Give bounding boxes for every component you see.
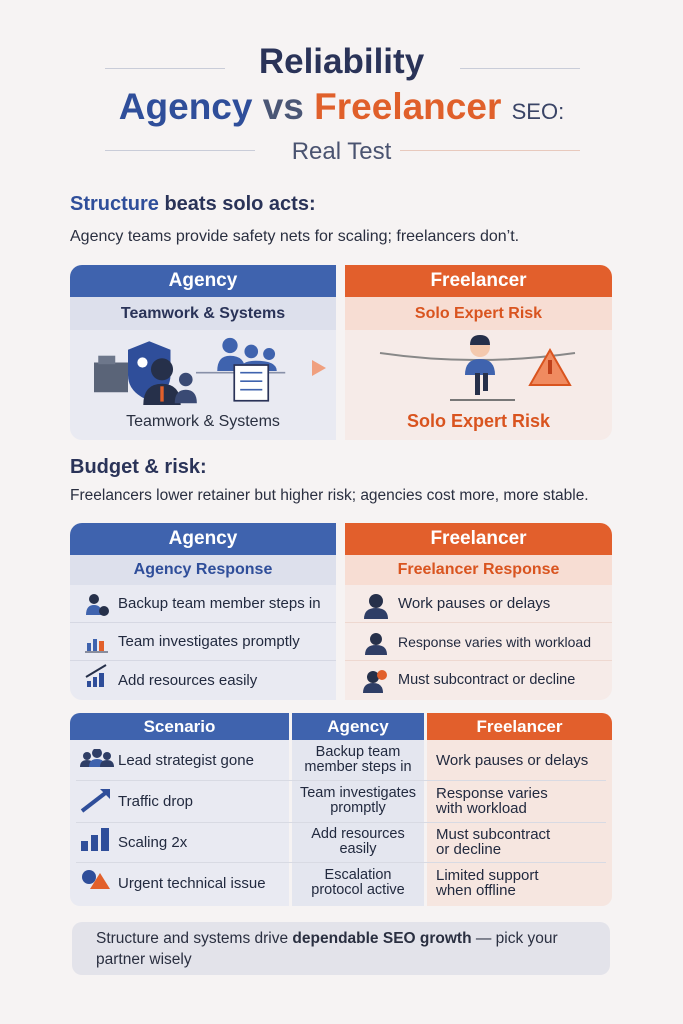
panel: freelancer response: Work pauses or delays <box>398 595 550 612</box>
panel: agency response: Agency <box>169 528 237 549</box>
table: scenarios: Agency <box>327 717 389 736</box>
panel: agency response: Backup team member steps in <box>118 595 321 612</box>
panel: agency teamwork <box>70 265 336 440</box>
callout: footer: Structure and systems drive dependable SEO growth — pick your partner wisely <box>96 930 558 968</box>
panel: agency teamwork: Teamwork & Systems <box>121 305 285 322</box>
panel: agency teamwork: Teamwork & Systems <box>126 413 280 430</box>
panel: freelancer response: Freelancer Response <box>398 561 559 578</box>
table: scenarios: Work pauses or delays <box>436 752 588 768</box>
panel: freelancer solo <box>345 265 612 440</box>
table: scenarios: Limited support <box>436 867 539 884</box>
panel: freelancer solo: Solo Expert Risk <box>415 305 542 322</box>
icon: team illustration <box>94 338 286 405</box>
table: scenarios: Scaling 2x <box>118 834 187 850</box>
panel: freelancer solo: Solo Expert Risk <box>407 411 550 431</box>
panel: freelancer response: Freelancer <box>430 528 527 549</box>
callout: footer <box>72 922 610 975</box>
table: scenarios: Team investigates <box>300 785 416 801</box>
table: scenarios: promptly <box>330 800 386 816</box>
table: scenarios: Must subcontract <box>436 826 550 843</box>
title: Agency vs Freelancer SEO: <box>119 86 564 127</box>
table: scenarios: Freelancer <box>476 717 562 736</box>
title <box>119 42 564 165</box>
panel: agency response: Add resources easily <box>118 672 257 688</box>
panel: agency response: Team investigates promptly <box>118 633 300 650</box>
title: Real Test <box>292 138 391 165</box>
title: Reliability <box>259 42 424 81</box>
table: scenarios: Response varies <box>436 785 548 802</box>
table: scenarios: when offline <box>436 882 516 899</box>
heading: structure: Structure beats solo acts: <box>70 193 316 215</box>
table: scenarios: Traffic drop <box>118 792 193 810</box>
table: scenarios: Urgent technical issue <box>118 874 266 892</box>
table: scenarios: Backup team <box>316 744 400 760</box>
panel: freelancer response <box>345 523 612 700</box>
icons: scenario rows <box>80 749 114 889</box>
table: scenarios: member steps in <box>304 759 412 775</box>
table: scenarios: Scenario <box>144 717 215 736</box>
icon: tightrope freelancer <box>380 335 576 401</box>
table: scenarios <box>70 713 612 906</box>
heading: budget: Budget & risk: <box>70 456 207 478</box>
panel: agency response: Agency Response <box>134 561 272 578</box>
table: scenarios: easily <box>339 841 377 857</box>
table: scenarios: Lead strategist gone <box>118 752 254 768</box>
table: scenarios: protocol active <box>311 882 405 898</box>
subtitle: budget: Freelancers lower retainer but higher risk; agencies cost more, more stable. <box>70 487 589 504</box>
table: scenarios: or decline <box>436 841 501 858</box>
panel: freelancer solo: Freelancer <box>430 270 527 291</box>
arrow <box>312 360 326 376</box>
panel: freelancer response: Response varies with workload <box>398 634 591 650</box>
table: scenarios: Escalation <box>325 867 391 883</box>
icons: freelancer rows <box>363 594 388 693</box>
table: scenarios: Add resources <box>311 826 405 842</box>
table: scenarios: with workload <box>436 800 527 817</box>
icons: agency rows <box>85 594 109 687</box>
subtitle: structure: Agency teams provide safety nets for scaling; freelancers don’t. <box>70 228 519 245</box>
panel: agency teamwork: Agency <box>169 270 237 291</box>
panel: agency response <box>70 523 336 700</box>
panel: freelancer response: Must subcontract or decline <box>398 672 575 688</box>
